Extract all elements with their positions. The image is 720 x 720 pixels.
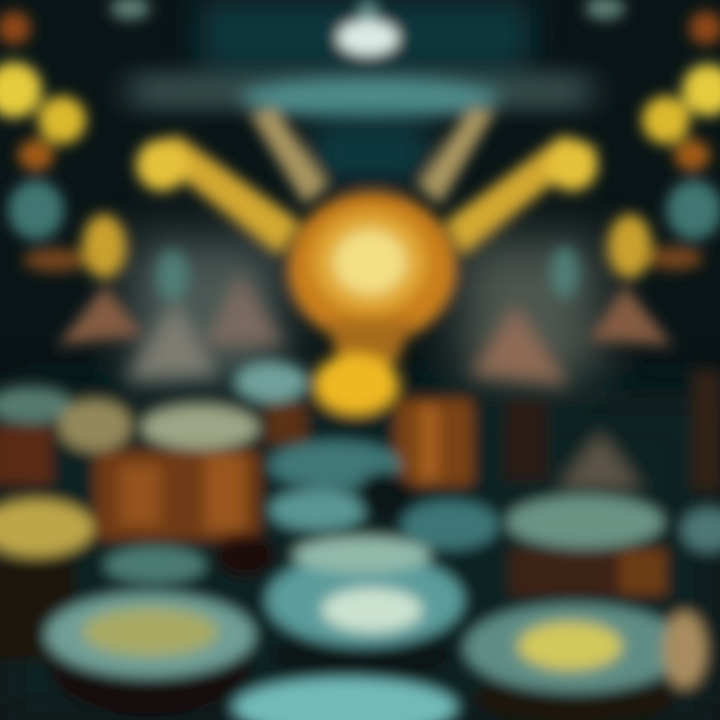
light bulb xyxy=(288,192,456,414)
floor glow xyxy=(233,678,457,720)
upper cups xyxy=(0,362,473,577)
middle cups xyxy=(0,370,720,660)
front center bowl xyxy=(267,537,463,683)
ceiling lamp xyxy=(110,0,625,56)
right lights xyxy=(590,11,720,345)
pale figures beside bulb xyxy=(125,246,645,490)
bulb rays xyxy=(136,108,598,255)
left lights xyxy=(0,11,142,345)
front left bowl xyxy=(46,593,254,716)
front right bowl xyxy=(465,604,707,720)
